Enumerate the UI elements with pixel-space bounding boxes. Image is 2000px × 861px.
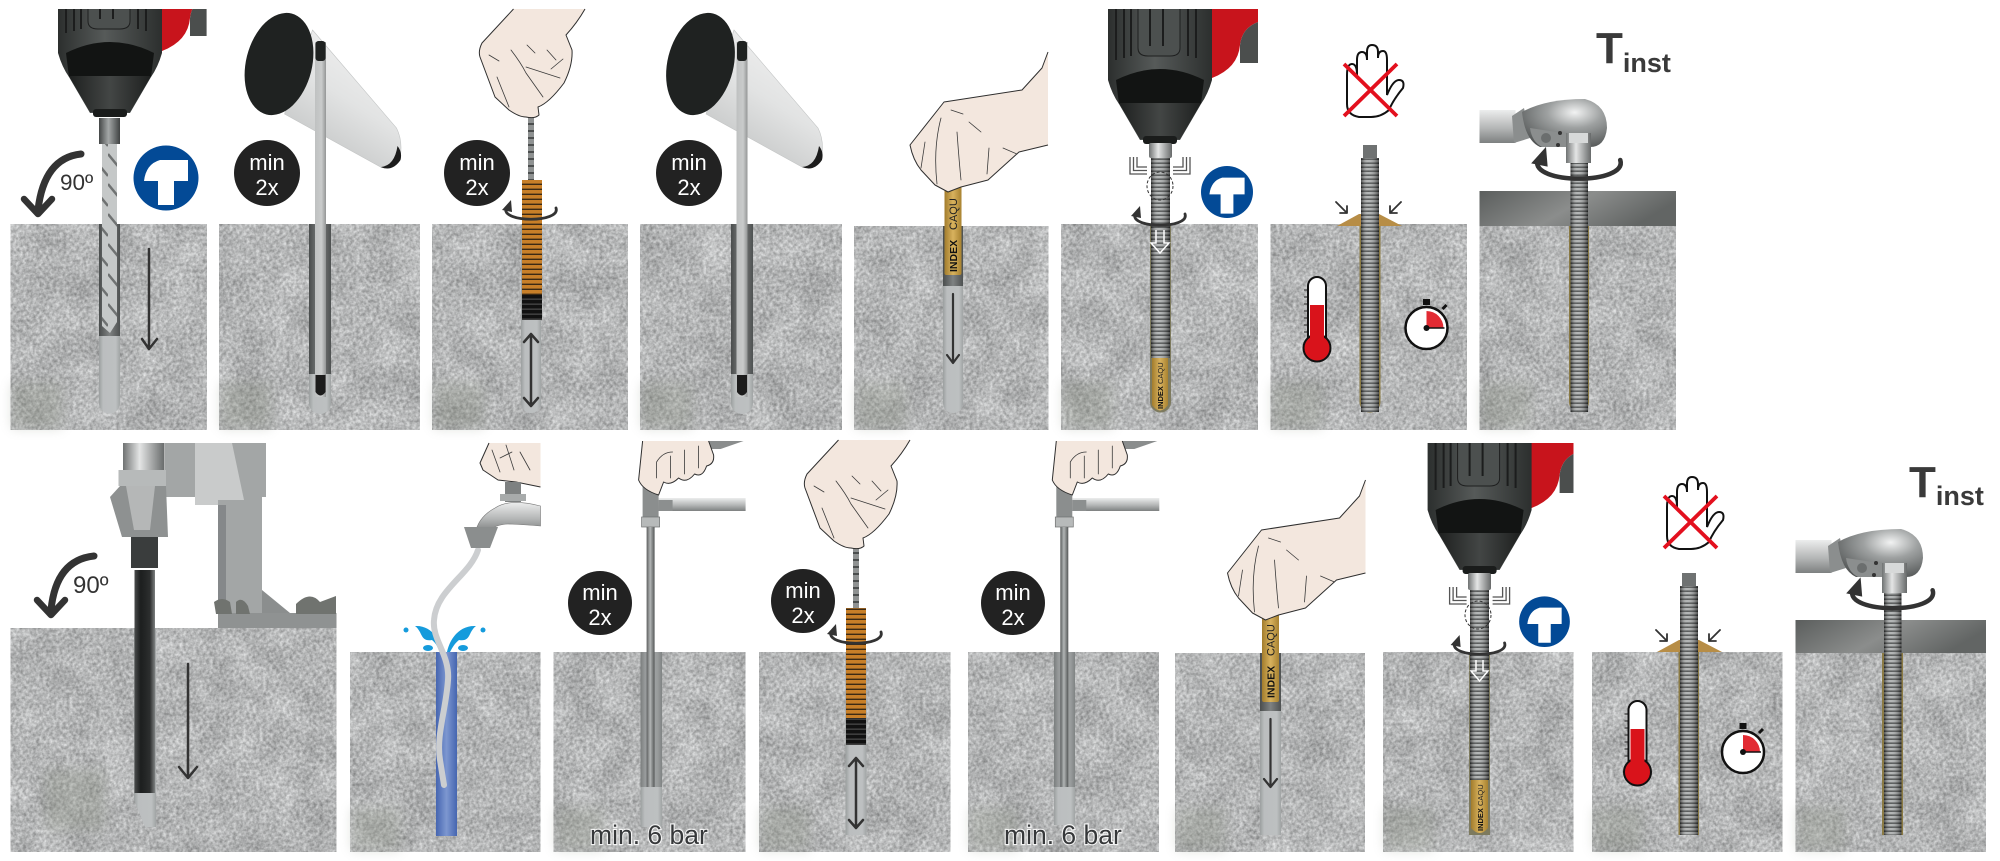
step 6: set threaded rod <box>1061 0 1258 430</box>
step 2 diamond: flush with water <box>350 443 540 852</box>
concrete block <box>10 224 207 430</box>
step 2: blow out <box>219 6 420 430</box>
hole <box>1678 652 1699 835</box>
concrete block <box>968 652 1159 852</box>
step 3 diamond: compressed air <box>554 441 746 852</box>
Tinst label: T <box>1596 24 1623 73</box>
capsule remainder <box>1471 780 1488 833</box>
steel plate <box>1796 620 1986 653</box>
down arrow <box>142 249 157 349</box>
concrete block <box>1175 653 1365 852</box>
brush stem <box>853 545 859 609</box>
hole <box>943 226 963 413</box>
stopwatch <box>1406 299 1448 349</box>
drill bit <box>102 144 117 333</box>
hole <box>731 224 753 414</box>
drill body <box>1428 443 1574 574</box>
hole dark part <box>309 224 331 374</box>
min 2x badge: min <box>785 578 821 603</box>
thermometer <box>1624 701 1651 786</box>
hole <box>1469 652 1490 835</box>
concrete block <box>350 652 540 852</box>
min 2x badge <box>981 571 1045 635</box>
rotation arrow <box>1531 147 1621 179</box>
min 2x badge: 2x <box>677 175 701 200</box>
concrete block <box>554 652 746 852</box>
pressure label: min. 6 bar <box>1004 820 1122 850</box>
concrete block <box>854 226 1048 430</box>
hole <box>521 224 541 413</box>
hole <box>846 652 866 835</box>
min 2x badge <box>771 569 835 633</box>
core bit <box>134 570 155 793</box>
step 9 diamond: torque <box>1796 458 1986 852</box>
hole <box>640 652 662 827</box>
torque wrench <box>1480 99 1607 163</box>
drill body <box>58 0 208 117</box>
blower pump <box>234 6 401 397</box>
left inward arrow <box>1656 630 1667 641</box>
capsule: CAQU <box>948 198 960 230</box>
air gun with hand <box>1052 441 1159 787</box>
threaded rod <box>1361 145 1379 412</box>
step 7 diamond: set threaded rod <box>1383 428 1578 852</box>
min 2x badge: min <box>995 580 1031 605</box>
hole <box>99 224 120 414</box>
step 6 diamond: insert capsule <box>1175 480 1366 852</box>
threaded rod <box>1680 573 1698 835</box>
concrete block <box>1061 224 1258 430</box>
min 2x badge <box>656 140 722 206</box>
hole dark part <box>1260 653 1281 711</box>
water filled hole <box>436 652 457 836</box>
min 2x badge <box>444 140 510 206</box>
threaded rod <box>1884 593 1902 835</box>
down arrow <box>1264 719 1277 787</box>
rotation arrow <box>1131 206 1185 225</box>
min 2x badge: 2x <box>465 175 489 200</box>
step 8 diamond: curing <box>1592 477 1782 852</box>
chuck <box>1149 143 1172 158</box>
hole dust shading <box>99 224 120 336</box>
concrete block <box>1592 652 1782 852</box>
angle label: 90º <box>60 170 93 195</box>
capsule remainder <box>1152 358 1168 410</box>
down arrow <box>179 664 197 778</box>
hole dark part <box>640 652 662 787</box>
water tap <box>464 482 540 548</box>
concrete block <box>1270 224 1467 430</box>
up and down arrow <box>524 334 538 406</box>
hole <box>1360 226 1380 412</box>
hand <box>1228 480 1366 620</box>
brush stem <box>528 116 534 181</box>
concrete block <box>219 224 420 430</box>
hole <box>1054 652 1075 825</box>
concrete block <box>759 652 950 852</box>
step 1 diamond: core drilling <box>10 443 336 852</box>
min 2x badge: 2x <box>588 605 612 630</box>
hammer mode icon <box>134 146 198 210</box>
threaded rod <box>1570 163 1588 412</box>
drill body <box>1108 0 1258 144</box>
thermometer <box>1304 277 1330 362</box>
capsule remainder: INDEX <box>1156 386 1165 409</box>
hammer mode icon <box>1519 596 1570 647</box>
vibration marks <box>1130 157 1190 174</box>
Tinst label: inst <box>1936 481 1984 511</box>
pressure label: min. 6 bar <box>590 820 708 850</box>
dashed circle <box>1147 172 1173 200</box>
step 3: brush <box>432 9 628 430</box>
threaded rod <box>1470 590 1489 780</box>
chuck <box>1468 573 1491 590</box>
min 2x badge: min <box>582 580 618 605</box>
down arrow <box>947 294 959 363</box>
right inward arrow <box>1390 202 1401 213</box>
do not touch icon <box>1664 477 1724 549</box>
drill shank <box>99 118 120 144</box>
capsule <box>1262 608 1279 702</box>
threaded rod <box>1151 158 1170 358</box>
right inward arrow <box>1709 630 1720 641</box>
hollow down arrow <box>1471 660 1488 681</box>
concrete block <box>1796 653 1986 852</box>
min 2x badge <box>234 140 300 206</box>
capsule remainder: CAQU <box>1476 784 1485 806</box>
step 4 diamond: brush <box>759 440 950 852</box>
hole <box>309 224 331 414</box>
steel plate <box>1480 191 1676 226</box>
drill motor <box>110 443 168 568</box>
capsule remainder: CAQU <box>1156 362 1165 384</box>
hand <box>804 440 910 549</box>
mortar pile <box>1337 214 1402 226</box>
Tinst label: inst <box>1623 48 1671 78</box>
rotation arrow <box>1451 635 1505 654</box>
min 2x badge <box>568 571 632 635</box>
hole dark part <box>1054 652 1075 787</box>
core hole <box>134 628 156 827</box>
stopwatch <box>1722 723 1764 773</box>
hand on tap <box>480 443 540 487</box>
rotation arrow <box>1846 577 1933 608</box>
angle label: 90º <box>73 572 109 599</box>
rotation arrow <box>827 624 881 643</box>
step 5 diamond: compressed air again <box>968 441 1159 852</box>
rotation angle arrow <box>37 556 94 615</box>
air gun with hand <box>639 441 746 787</box>
rotation angle arrow <box>24 154 81 214</box>
min 2x badge: 2x <box>255 175 279 200</box>
water splash <box>404 626 486 652</box>
hole <box>1882 653 1903 835</box>
drill stand <box>165 443 336 628</box>
capsule: CAQU <box>1266 624 1278 656</box>
concrete block <box>1480 226 1676 430</box>
brush bristles <box>846 608 866 718</box>
hole <box>1150 224 1171 412</box>
capsule <box>944 182 962 275</box>
hole <box>1569 226 1589 412</box>
min 2x badge: min <box>671 150 707 175</box>
capsule remainder: INDEX <box>1476 808 1485 831</box>
left inward arrow <box>1336 202 1347 213</box>
dashed circle <box>1465 601 1491 629</box>
brush black tip <box>846 718 866 745</box>
water hose <box>434 550 478 785</box>
mortar pile <box>1657 640 1722 652</box>
rotation arrow <box>502 200 556 219</box>
hole dark part <box>731 224 753 374</box>
step 8: torque <box>1480 24 1676 430</box>
blower pump <box>656 6 823 397</box>
do not touch icon <box>1344 45 1404 117</box>
hand <box>479 9 585 118</box>
brush black tip <box>522 295 542 320</box>
min 2x badge: min <box>249 150 285 175</box>
hole <box>1260 653 1281 835</box>
torque wrench <box>1796 529 1923 593</box>
vibration marks <box>1450 587 1510 604</box>
Tinst label: T <box>1909 458 1936 507</box>
concrete block <box>640 224 842 430</box>
concrete block <box>432 224 628 430</box>
up and down arrow <box>849 758 863 828</box>
min 2x badge: min <box>459 150 495 175</box>
hollow down arrow <box>1151 230 1169 253</box>
hammer mode icon <box>1201 166 1253 218</box>
step 5: insert capsule <box>854 52 1048 430</box>
capsule: INDEX <box>948 240 960 272</box>
capsule: INDEX <box>1266 666 1278 698</box>
step 7: curing <box>1270 45 1467 430</box>
concrete block <box>10 628 336 852</box>
brush bristles <box>522 180 542 295</box>
concrete block <box>1383 652 1574 852</box>
hand <box>910 52 1048 192</box>
min 2x badge: 2x <box>1001 605 1025 630</box>
hole dark part <box>943 226 963 286</box>
min 2x badge: 2x <box>791 603 815 628</box>
step 4: blow out again <box>640 6 842 430</box>
step 1: hammer drilling <box>10 0 208 430</box>
